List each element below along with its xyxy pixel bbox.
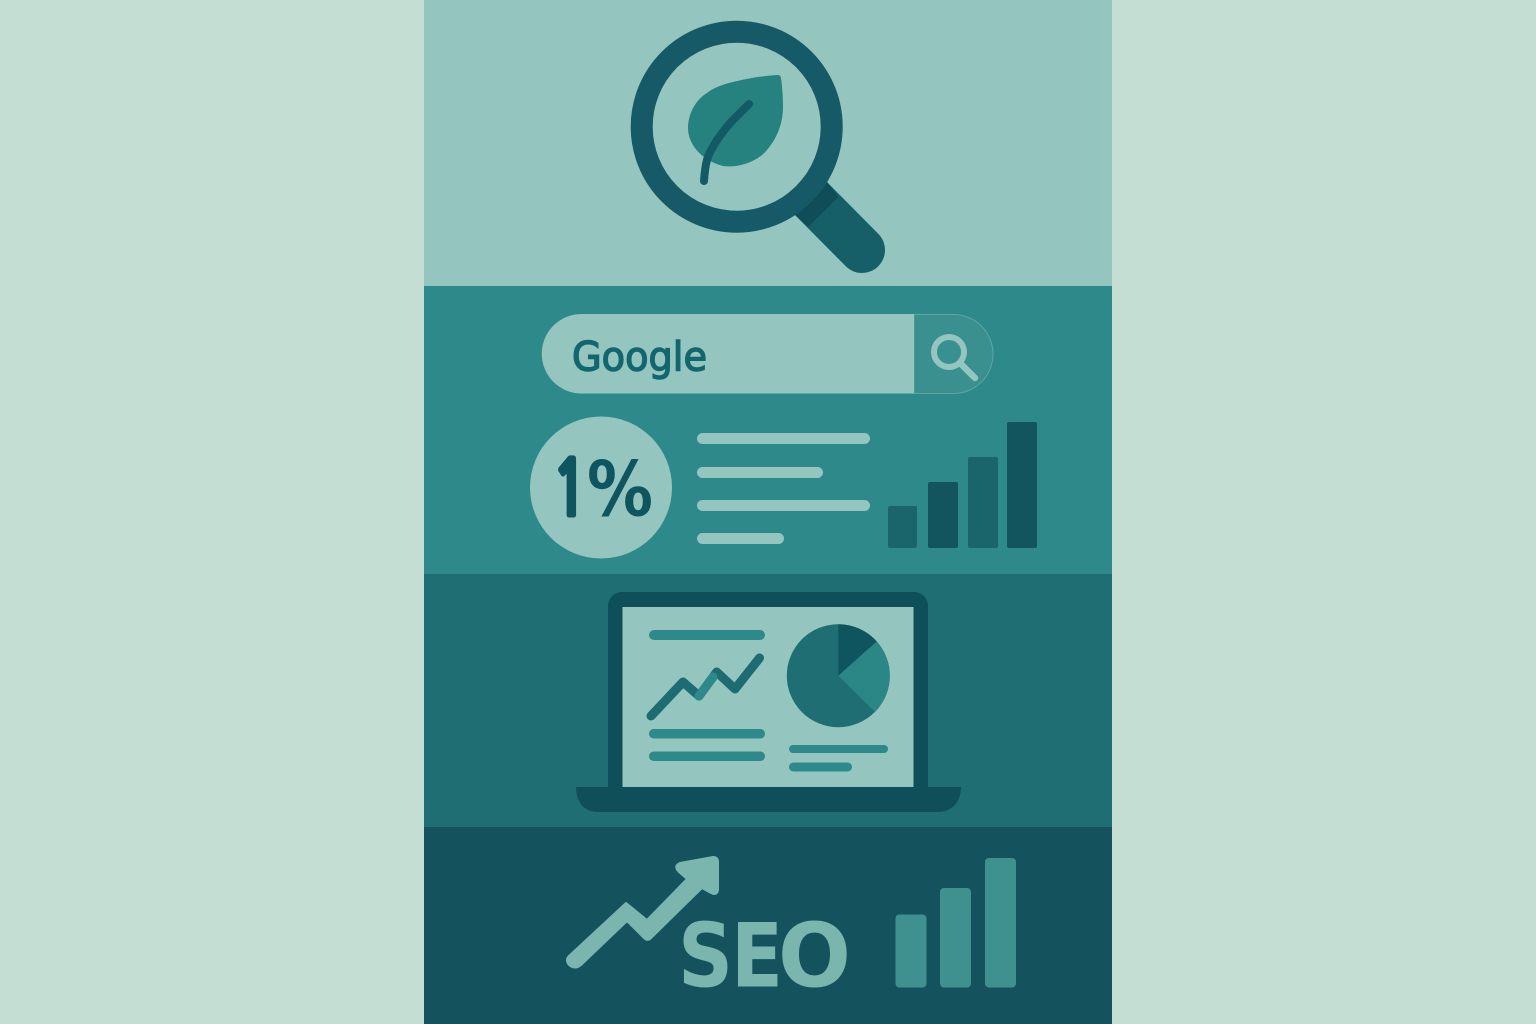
icon: small search	[934, 337, 975, 378]
panel: laptop analytics	[424, 574, 1112, 827]
panel background: deep teal	[424, 574, 1112, 827]
icon: magnifier lens	[642, 32, 832, 222]
bar chart: rising bars	[888, 422, 1037, 548]
SEO label: O	[778, 904, 851, 1008]
icon: laptop body	[576, 592, 961, 812]
SEO label: E	[731, 904, 783, 1008]
pie chart	[787, 624, 890, 727]
panel background: mid teal	[424, 286, 1112, 574]
screen text lines	[649, 630, 888, 772]
stat: 1% circle: %	[587, 444, 653, 534]
icon: leaf	[688, 75, 783, 181]
stat: 1% circle: 1	[552, 452, 588, 528]
bar chart: SEO bars	[896, 858, 1016, 988]
panel background: darkest teal	[424, 827, 1112, 1024]
SEO label: S	[678, 904, 733, 1008]
result lines	[697, 433, 870, 544]
search bar label: Google	[572, 334, 707, 380]
panel background: light teal	[424, 0, 1112, 286]
stat: 1% circle	[530, 416, 672, 558]
panel: magnifier with leaf	[424, 0, 1112, 286]
panel: search results	[424, 286, 1112, 574]
search bar	[542, 314, 993, 394]
icon: magnifier handle	[795, 182, 862, 250]
panel: SEO growth	[424, 827, 1112, 1024]
line chart	[651, 658, 760, 716]
arrow: upward trend	[567, 857, 718, 968]
